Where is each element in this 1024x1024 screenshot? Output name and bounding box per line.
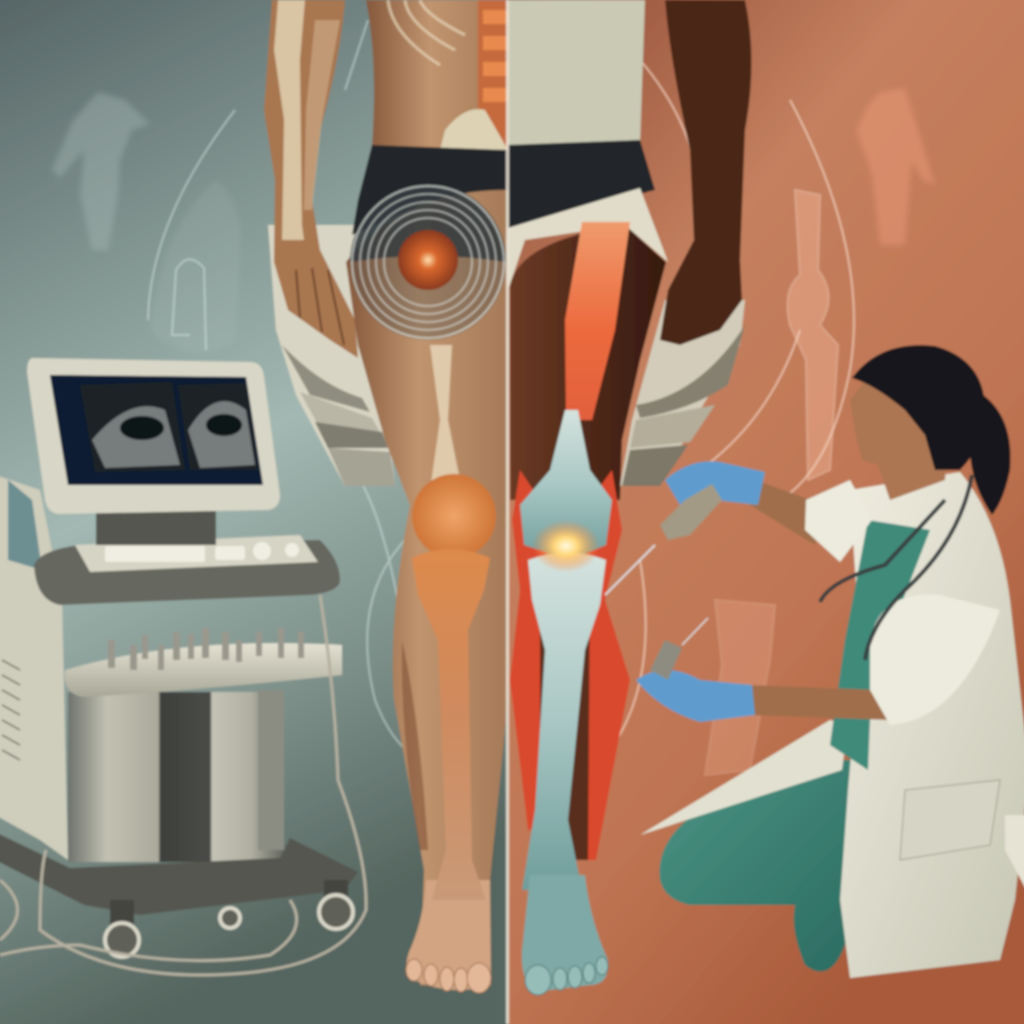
keys xyxy=(105,542,299,562)
arm bone overlay xyxy=(274,0,305,240)
scrub top xyxy=(830,520,930,770)
stethoscope xyxy=(820,475,972,660)
foot right xyxy=(522,875,608,992)
shorts right xyxy=(508,140,655,228)
patient: right half, dark body xyxy=(508,0,752,995)
exam table: left cushion xyxy=(268,225,395,486)
monitor stem xyxy=(96,505,216,545)
coat body xyxy=(840,472,1024,978)
coat left tail xyxy=(640,720,848,835)
ultrasound target: concentric rings xyxy=(350,184,506,340)
caster stems xyxy=(110,880,348,928)
spine overlay xyxy=(440,0,508,150)
foot left xyxy=(406,880,491,990)
femur right xyxy=(520,410,612,560)
femur and knee xyxy=(412,474,496,558)
casters xyxy=(105,895,353,957)
syringe xyxy=(650,640,682,680)
sleeve upper xyxy=(805,480,872,562)
tray xyxy=(65,643,342,697)
machine side panel xyxy=(8,480,42,570)
keyboard deck xyxy=(75,535,318,572)
shirt xyxy=(508,0,645,148)
ultrasound image B xyxy=(178,383,258,470)
monitor xyxy=(27,358,280,514)
ghost anatomy: left faint figure xyxy=(52,92,241,353)
centre divider line xyxy=(506,0,509,1024)
red muscle right xyxy=(578,470,630,860)
coat pocket xyxy=(900,780,1000,860)
torso left xyxy=(366,0,508,150)
arm left with bones xyxy=(264,0,358,358)
lower arm xyxy=(745,685,890,720)
base xyxy=(0,832,358,915)
machine body xyxy=(0,475,68,860)
trousers xyxy=(660,760,868,972)
patient: left half, pale body xyxy=(264,0,508,993)
tibia bone left xyxy=(412,549,490,900)
right vented panel xyxy=(258,690,284,850)
storage column xyxy=(68,692,283,862)
ghost anatomy: right leg bones xyxy=(705,190,838,775)
calf base xyxy=(540,580,590,860)
tray pegs xyxy=(108,628,304,670)
glove lower xyxy=(636,670,755,722)
tibia right xyxy=(522,552,606,890)
clinician xyxy=(605,345,1024,978)
arm right xyxy=(660,0,752,345)
shorts cuff xyxy=(508,188,668,290)
ghost anatomy: right faint figure xyxy=(856,88,935,245)
sleeve lower xyxy=(870,595,1000,725)
syringe needle xyxy=(682,618,708,645)
red muscles around knee xyxy=(510,470,552,830)
red muscle band xyxy=(565,222,630,420)
foot xyxy=(1005,815,1024,895)
glove upper xyxy=(665,461,765,505)
ghost anatomy: left curved lines xyxy=(148,20,415,756)
neck and face xyxy=(850,372,950,500)
panel: right warm background xyxy=(508,0,1024,1024)
tendon stream xyxy=(430,345,462,490)
ultrasound image A xyxy=(80,382,185,472)
shorts left xyxy=(352,145,508,235)
cables xyxy=(0,595,366,975)
toes right xyxy=(525,957,608,995)
screen xyxy=(50,375,263,485)
vent slats xyxy=(2,660,20,760)
ponytail xyxy=(970,388,1011,515)
ultrasound machine xyxy=(0,358,366,975)
ultrasound probe xyxy=(660,484,722,540)
calf shadow xyxy=(402,640,428,850)
thigh right xyxy=(510,225,666,500)
left hand fingers xyxy=(296,268,344,345)
pain glow xyxy=(532,520,600,572)
forearm bone overlay xyxy=(304,20,340,210)
exam table: right cushion xyxy=(620,300,745,486)
rib anatomy overlay xyxy=(388,0,465,65)
probe needle xyxy=(605,545,655,595)
panel: left cool background xyxy=(0,0,508,1024)
arm upper xyxy=(750,478,825,545)
hair xyxy=(852,345,985,470)
thigh and calf left xyxy=(346,190,508,985)
ghost anatomy: right curved lines xyxy=(610,60,854,750)
keyboard console xyxy=(34,540,340,605)
toes left xyxy=(406,959,491,993)
